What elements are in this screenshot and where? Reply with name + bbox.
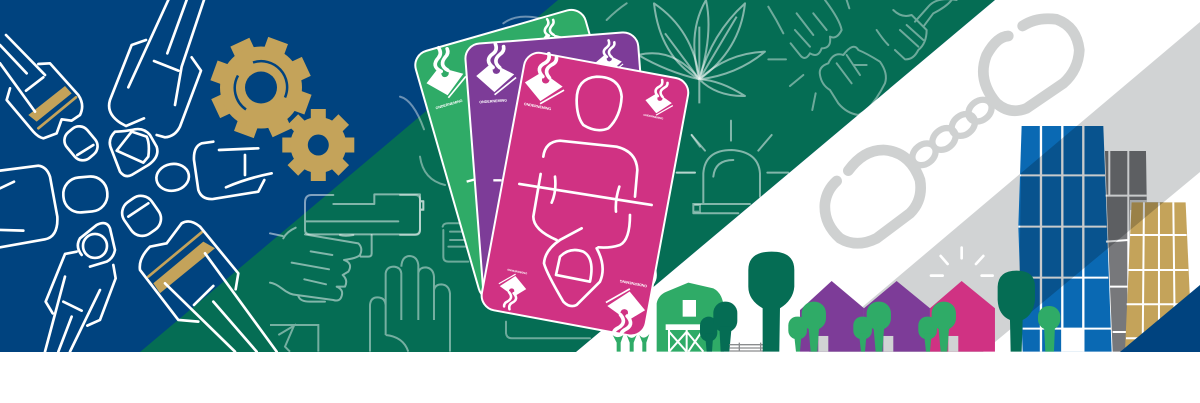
fence (729, 343, 764, 352)
purple house 2 (864, 281, 930, 352)
card: pink with figure (479, 50, 691, 341)
card corner labels: ONDERNEMING (507, 268, 528, 276)
figure: top person outline (109, 0, 204, 176)
building: gold tower (1125, 202, 1190, 352)
light green trees by houses (788, 302, 956, 352)
navy corner panel (1120, 285, 1200, 352)
background: green diagonal panel (140, 0, 995, 352)
icon: cannabis leaf outline (638, 0, 765, 103)
icon: envelope outline (270, 325, 318, 352)
purple house 1 (800, 281, 864, 352)
background: grey diagonal band (809, 22, 1200, 352)
icon: pistol in hand outline (270, 194, 423, 302)
barn (657, 283, 724, 352)
icon: large gold gear (214, 41, 308, 134)
large dark green tree (748, 252, 794, 352)
trees beside barn (700, 302, 737, 352)
icon: handcuffs (825, 19, 1079, 243)
icon: sparkle rays above pink house (931, 248, 993, 276)
card: green (412, 6, 653, 303)
figure: left person outline (0, 166, 109, 247)
icon: raised hand outline (370, 256, 450, 352)
figure on pink card (519, 77, 652, 306)
light green tree by tower (1038, 306, 1060, 352)
card corner labels (507, 102, 664, 288)
icon: card logos (497, 52, 675, 341)
figure: upper-left person outline with gold band (0, 35, 102, 165)
white footer strip (0, 352, 1200, 403)
card corner labels: ONDERNEMING (619, 279, 647, 288)
card: green: ONDERNEMING (435, 99, 463, 110)
pink house (930, 281, 995, 352)
small tees under card (613, 334, 649, 352)
card corner labels: ONDERNEMING (523, 102, 552, 111)
figure: lower-left person outline (45, 223, 116, 352)
icon: siren outline (677, 121, 788, 213)
building: grey tower (1105, 151, 1147, 352)
figure: lower-right person outline with gold band (117, 191, 277, 352)
icon: hands and fist outlines (768, 0, 957, 115)
grey band shading over buildings (1020, 126, 1164, 312)
dark green tree by tower (998, 271, 1035, 352)
card: purple: ONDERNEMING (479, 98, 507, 104)
background: white diagonal panel (576, 0, 1200, 352)
icon: small gold gear (282, 109, 354, 181)
icon: background outlines behind the cards (400, 3, 700, 338)
building: blue tower (1018, 126, 1112, 352)
card corner labels: ONDERNEMING (643, 113, 664, 120)
figure: right person outline (154, 142, 272, 199)
card: purple (464, 31, 657, 302)
